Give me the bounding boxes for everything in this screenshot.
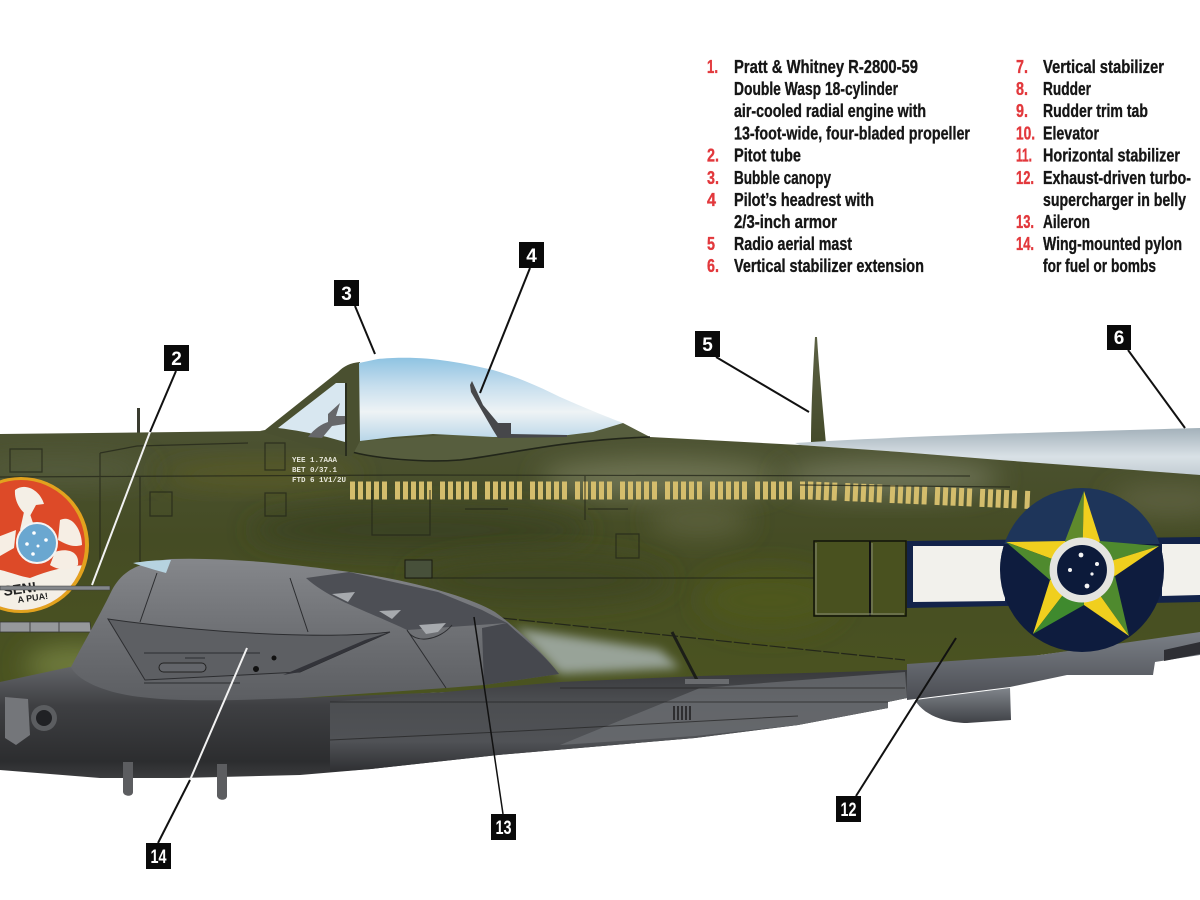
badge 14: 14 — [150, 847, 167, 868]
aircraft illustration — [0, 337, 1200, 800]
legend right column — [1016, 56, 1191, 276]
badge 5: 5 — [702, 335, 713, 356]
bomb rack post right — [217, 764, 227, 800]
wing — [71, 559, 559, 700]
canopy frame — [260, 362, 360, 456]
leader 6 — [1128, 350, 1185, 428]
legend right column: Elevator — [1043, 122, 1099, 144]
roundel — [1000, 488, 1164, 652]
door panel — [814, 541, 906, 616]
legend left column: Vertical stabilizer extension — [734, 255, 924, 276]
bubble canopy glass — [359, 358, 623, 441]
legend right column: Vertical stabilizer — [1043, 56, 1164, 77]
leader 2 — [92, 371, 176, 585]
legend right column: 13. — [1016, 211, 1034, 232]
badge 5 — [695, 331, 720, 357]
leader 5 — [716, 357, 809, 412]
belly mid section — [330, 670, 907, 772]
wing guns — [0, 622, 91, 632]
leader 3 — [355, 306, 375, 354]
nose emblem — [0, 477, 90, 620]
canopy rear deck — [346, 423, 650, 461]
badge 2 — [164, 345, 189, 371]
nose emblem: A PUA! — [17, 591, 49, 605]
exhaust port — [5, 697, 57, 745]
badge 4: 4 — [526, 246, 537, 267]
legend right column: 10. — [1016, 122, 1035, 144]
legend left column — [707, 56, 970, 276]
legend right column: 12. — [1016, 167, 1034, 188]
belly left — [0, 667, 907, 778]
legend left column: Double Wasp 18-cylinder — [734, 78, 898, 99]
legend left column: 6. — [707, 255, 719, 276]
legend left column: 1. — [707, 56, 718, 77]
leader 12 — [856, 638, 956, 796]
badge 14 — [146, 843, 171, 869]
windscreen glass — [278, 383, 345, 442]
belly light panel right — [560, 672, 907, 745]
callout badges — [146, 242, 1131, 869]
pylon — [108, 619, 390, 680]
legend right column: 8. — [1016, 78, 1028, 99]
bomb rack post left — [123, 762, 133, 796]
badge 6 — [1107, 325, 1131, 350]
serial stencil: FTD 6 1V1/2U — [292, 477, 347, 485]
pale markers — [332, 592, 446, 634]
legend left column: 5 — [707, 233, 715, 254]
serial stencil: BET 0/37.1 — [292, 467, 338, 475]
wing panel lines — [140, 573, 452, 688]
camouflage weathering — [0, 456, 1200, 685]
white stripe left — [913, 546, 1005, 602]
legend right column: 14. — [1016, 233, 1034, 254]
legend left column: Pratt & Whitney R-2800-59 — [734, 56, 918, 77]
vertical stabilizer extension — [795, 428, 1200, 476]
belly grille — [674, 706, 690, 720]
leader 13 — [474, 617, 503, 814]
legend left column: Pitot tube — [734, 144, 801, 166]
fuselage green — [0, 431, 1200, 700]
trim stick — [672, 632, 697, 680]
legend right column: 7. — [1016, 56, 1028, 77]
legend right column: 9. — [1016, 100, 1028, 121]
dark rear strip — [1164, 642, 1200, 661]
fuselage panel lines — [0, 443, 1010, 578]
badge 12: 12 — [840, 800, 856, 821]
legend left column: 4 — [707, 189, 717, 210]
leader 14 — [158, 648, 247, 843]
serial stencil: YEE 1.7AAA — [292, 457, 338, 465]
badge 2: 2 — [171, 349, 182, 370]
turbo-supercharger scoop — [915, 688, 1011, 723]
trim plate — [685, 679, 729, 684]
legend left column: 3. — [707, 167, 719, 188]
belly seams — [330, 688, 905, 740]
badge 12 — [836, 796, 861, 822]
badge 4 — [519, 242, 544, 268]
leader lines — [92, 268, 1185, 843]
canopy sill line — [352, 437, 650, 461]
radio aerial mast — [811, 337, 826, 444]
legend right column: Rudder — [1043, 78, 1091, 99]
badge 3 — [334, 280, 359, 306]
pilot's headrest — [470, 381, 567, 438]
legend right column: for fuel or bombs — [1043, 255, 1156, 276]
pitot tube — [0, 586, 110, 590]
legend right column: Rudder trim tab — [1043, 100, 1148, 121]
legend left column: Radio aerial mast — [734, 233, 852, 254]
gunsight — [308, 403, 345, 438]
legend left column: Pilot’s headrest with — [734, 189, 874, 210]
serial stencil — [292, 457, 347, 485]
markings stripe — [907, 537, 1200, 608]
legend left column: 2/3-inch armor — [734, 211, 837, 232]
belly rear — [907, 632, 1200, 700]
white stripe right — [1162, 544, 1200, 596]
legend right column: 11. — [1016, 144, 1032, 166]
legend left column: 2. — [707, 144, 719, 166]
legend left column: air-cooled radial engine with — [734, 100, 926, 121]
nose emblem: SEN! — [2, 578, 38, 599]
small antenna post — [137, 408, 140, 434]
leader 4 — [480, 268, 530, 393]
kill marks — [350, 490, 1030, 500]
legend left column: Bubble canopy — [734, 167, 832, 188]
inboard wing dark panel — [482, 623, 559, 685]
legend left column: 13-foot-wide, four-bladed propeller — [734, 122, 970, 144]
aileron panel — [306, 572, 507, 630]
legend right column: Aileron — [1043, 211, 1090, 232]
windshield post line — [345, 383, 347, 456]
wingtip light — [133, 560, 171, 573]
badge 3: 3 — [341, 284, 352, 305]
badge 6: 6 — [1114, 328, 1124, 349]
badge 13: 13 — [496, 818, 512, 839]
placard — [405, 560, 432, 578]
badge 13 — [491, 814, 516, 840]
star — [1006, 491, 1159, 636]
rivet line — [501, 618, 905, 660]
